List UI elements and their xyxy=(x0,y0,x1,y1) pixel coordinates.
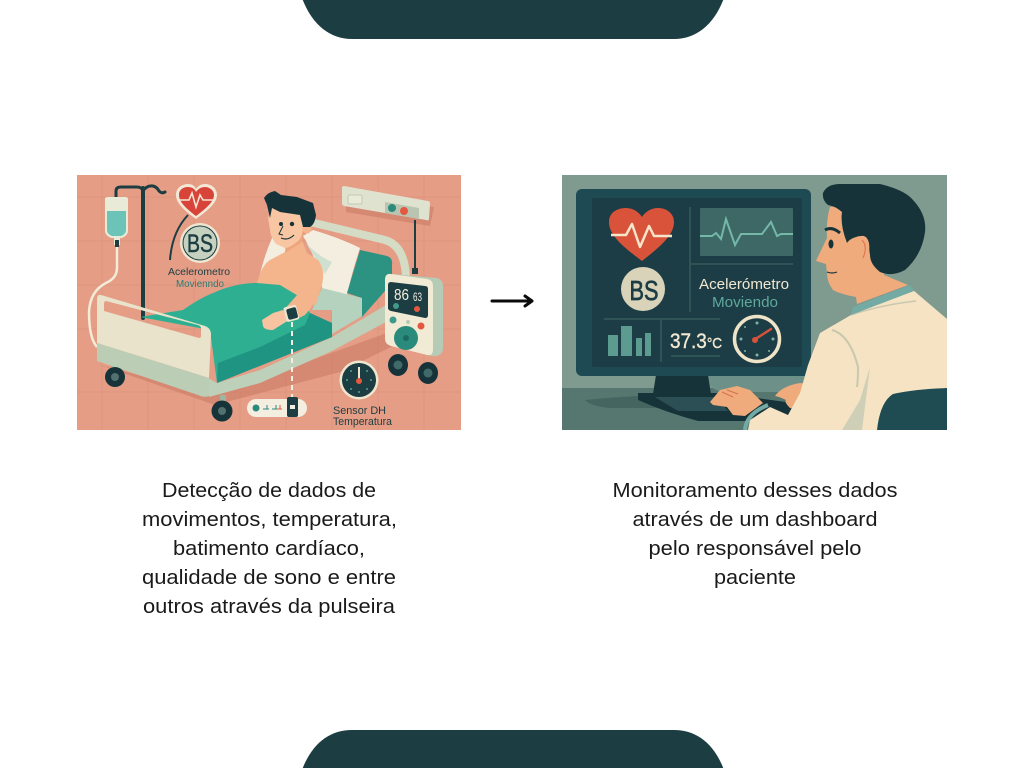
collar xyxy=(851,285,914,315)
headboard rail xyxy=(310,222,406,278)
bed base side xyxy=(208,305,386,397)
icon: BS badge: BS xyxy=(187,230,213,258)
dashboard BS badge xyxy=(621,267,665,311)
top banner shape xyxy=(302,0,724,39)
computer monitor xyxy=(576,189,812,394)
dashed sensor line xyxy=(291,322,293,398)
dashboard label: acelerometro: Acelerómetro xyxy=(699,276,789,293)
doctor xyxy=(710,184,947,430)
dashboard label: moviendo: Moviendo xyxy=(712,294,778,311)
hair xyxy=(823,184,925,274)
icon: BS badge xyxy=(180,223,220,263)
caption: left panel: qualidade de sono e entre xyxy=(142,567,396,589)
iv pole xyxy=(116,186,165,318)
torso xyxy=(257,240,318,305)
arrow xyxy=(492,296,532,306)
dashboard heart xyxy=(609,208,674,261)
illustration: patient in hospital bed with sensors xyxy=(77,175,461,430)
caption: right panel: Monitoramento desses dados xyxy=(612,480,898,502)
caption: left panel: Detecção de dados de xyxy=(162,480,376,502)
caption: right panel: paciente xyxy=(714,567,796,589)
pillow xyxy=(260,230,360,294)
connector curve xyxy=(170,215,188,260)
illustration: doctor monitoring dashboard xyxy=(562,175,947,430)
eye and brow xyxy=(828,240,834,248)
monitor device: 86 xyxy=(394,287,409,304)
bar chart xyxy=(608,326,651,356)
mattress xyxy=(312,288,362,334)
left hand xyxy=(710,386,763,416)
label: acelerometro: Acelerometro xyxy=(168,266,230,278)
neck and face xyxy=(816,205,908,304)
blanket xyxy=(140,283,332,383)
dashboard BS badge: BS xyxy=(630,275,658,306)
label: movienndo: Movienndo xyxy=(176,278,224,290)
caption: right panel: pelo responsável pelo xyxy=(648,538,862,560)
caption: left panel: batimento cardíaco, xyxy=(173,538,365,560)
icon: heart xyxy=(176,184,217,219)
caption: left panel xyxy=(142,480,397,618)
label: sensor DH: Sensor DH xyxy=(333,405,386,417)
chair back xyxy=(877,388,947,430)
right hand xyxy=(775,383,808,410)
iv bag xyxy=(89,197,128,347)
keyboard xyxy=(638,393,800,421)
sensor strip xyxy=(247,397,307,417)
arm xyxy=(283,260,323,320)
far side blanket xyxy=(347,250,392,317)
patient xyxy=(262,191,323,330)
floor shadow under bed xyxy=(100,330,395,405)
monitor device: 63 xyxy=(413,290,422,304)
gauge xyxy=(734,316,780,362)
caption: left panel: outros através da pulseira xyxy=(143,596,396,618)
hair xyxy=(264,191,316,227)
caption: right panel xyxy=(612,480,898,589)
monitor device xyxy=(385,274,443,384)
wall panel xyxy=(342,186,434,274)
label: temperatura: Temperatura xyxy=(333,416,393,428)
ecg chart xyxy=(700,208,793,256)
icon: wristwatch xyxy=(283,304,300,322)
hand xyxy=(262,310,289,330)
wheels xyxy=(105,367,232,422)
neck xyxy=(285,234,302,253)
ear xyxy=(857,236,869,266)
icon: temperature clock xyxy=(340,360,378,400)
face xyxy=(268,206,304,248)
bottom banner shape xyxy=(302,730,724,768)
desk xyxy=(562,388,947,430)
footboard xyxy=(97,295,223,411)
caption: left panel: movimentos, temperatura, xyxy=(142,509,397,531)
caption: right panel: através de um dashboard xyxy=(632,509,878,531)
coat xyxy=(748,290,947,430)
temperature reading: 37.3°C xyxy=(670,330,722,353)
sleeve cuff xyxy=(745,405,768,430)
